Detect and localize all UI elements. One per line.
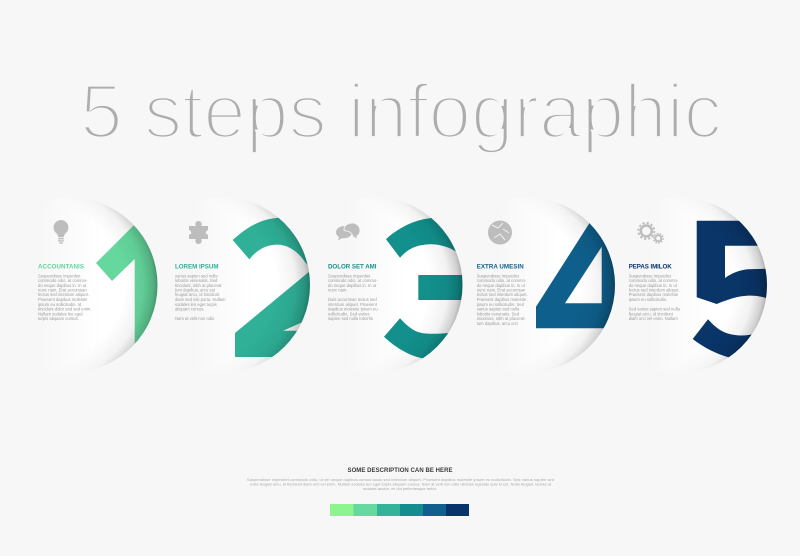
text block 4: varius sapien sed nulla [477,306,520,312]
text block 5: Sed varius sapien sed nulla [629,306,681,312]
text block 5: do neque dapibus in. In ut [629,283,678,288]
text block 4: nunc nam. Erat accumsan [477,288,526,292]
text block 1: Praesent dapibus molestie [38,297,88,302]
text block 1: Nullam sodales leo eget [38,312,84,316]
text block 2: varius sapien sed nulla [175,274,218,278]
text block 1: do neque dapibus in. In ut [38,283,87,288]
text block 4: maximus, nibh at placerat- [477,316,526,321]
text block 5: Praesent dapibus molestie [629,292,679,297]
text block 2: tum dapibus, arcu est [175,288,216,292]
edge shadow 1 [92,200,158,370]
icon: light bulb [54,220,68,244]
numeral 1 [96,225,158,344]
description heading: SOME DESCRIPTION CAN BE HERE [348,468,452,474]
text block 5: commodo odio, at commo- [629,278,679,283]
heading 1: ACCOUNTANIS [38,264,84,271]
circle cut-out 2 [135,198,310,372]
text block 4: commodo odio, at commo- [477,278,527,283]
text block 5: lectus sed interdum aliquet. [629,288,680,292]
numeral 3 [384,218,462,358]
circle cut-out 5 [592,198,767,372]
icon: speech bubbles [336,223,360,240]
text block 3: interdum aliquet. Praesent [328,302,378,307]
text block 4: Suspendisse imperdiet [477,274,520,278]
edge shadow 3 [396,200,462,370]
icon: globe [488,220,512,244]
circle cut-out 1 [0,198,158,372]
text block 4: lobortis venenatis. Sed [477,312,520,316]
description text: Suspendisse imperdiet commodo odio, ut vel neque dapibus cursus lacus sed interdum aliquet. Praesent dapibus molestie ipsum eu sollicitudin. Sed varius sapien sed [247,477,554,482]
text block 4: do neque dapibus in. In ut [477,283,526,288]
description text: sodales auctor, mi dui pellentesque tortor. [363,486,437,491]
panel: step 1 [38,204,158,366]
text block 3: commodo odio, at commo- [328,278,378,283]
text block 4: lectus sed interdum aliquet. [477,292,528,297]
text block 1: lectus sed interdum aliquet. [38,292,89,297]
text block 4: tum dapibus, arcu orci [477,321,518,326]
text block 3: Duis accumsan lectus sed [328,297,377,302]
text block 2: feugiat arcu, id tincidunt [175,292,220,297]
text block 1: nunc nam. Erat accumsan [38,288,87,292]
text block 3: nunc nam. [328,288,348,292]
heading 3: DOLOR SET AMI [328,264,377,271]
text block 4: ipsum eu sollicitudin. Sed [477,302,525,307]
panel: step 4 [476,204,615,366]
description text: nulla feugiat arcu, id tincidunt diam orci vel enim. Nullam sodales leo eget turpis aliquam cursus. Nam at velit non odio ultricies egestas quis id est. Nulla feugiat, lacinia ut [250,482,552,487]
circle cut-out 4 [440,198,615,372]
heading 4: EXTRA UMESIN [477,264,524,271]
icon: gears [638,223,663,243]
text block 3: Suspendisse imperdiet [328,274,371,278]
panel: description [247,468,554,516]
text block 1: commodo odio, at commo- [38,278,88,283]
text block 3: dapibus molestie ipsum eu [328,306,378,312]
circle cut-out 3 [288,198,462,372]
panel: step 5 [628,204,767,366]
text block 4: Praesent dapibus molestie [477,297,527,302]
numeral 4 [536,223,615,328]
numeral 2 [232,218,310,357]
text block 1: Suspendisse imperdiet [38,274,81,278]
text block 3: sollicitudin. Sed varius [328,312,369,316]
text block 5: Suspendisse imperdiet [629,274,672,278]
edge shadow 5 [701,200,767,370]
text block 5: ipsum eu sollicitudin. [629,297,667,302]
panel: step 3 [328,204,462,366]
edge shadow 4 [549,200,615,370]
heading 2: LOREM IPSUM [175,264,218,271]
edge shadow 2 [244,200,310,370]
text block 2: sodales leo eget turpis [175,302,217,307]
panel: step 2 [175,204,310,366]
text block 5: feugiat arcu, id tincidunt [629,312,674,316]
text block 3: sapien sed nulla lobortis [328,316,373,321]
text block 2: Nam at velit non odio [175,316,215,321]
icon: puzzle piece [187,221,210,244]
text block 3: do neque dapibus in. In ut [328,283,377,288]
text block 5: diam orci vel enim. Nullam [629,316,678,321]
text block 1: tincidunt dolor and sed enim. [38,306,92,312]
text block 2: tincidunt, nibh at placerat [175,283,222,288]
text block 1: ipsum eu sollicitudin. Id [38,302,82,307]
numeral 5 [692,220,767,358]
text block 2: diam sed nisi porta. Nullam [175,297,226,302]
colour palette bar [330,504,469,516]
text block 2: lobortis venenatis. Sed [175,278,218,283]
text block 1: turpis aliquam cursus. [38,316,79,321]
heading 5: PEPAS IMILOK [629,264,672,271]
title: 5 steps infographic [80,69,722,155]
text block 2: aliquam cursus. [175,306,204,312]
